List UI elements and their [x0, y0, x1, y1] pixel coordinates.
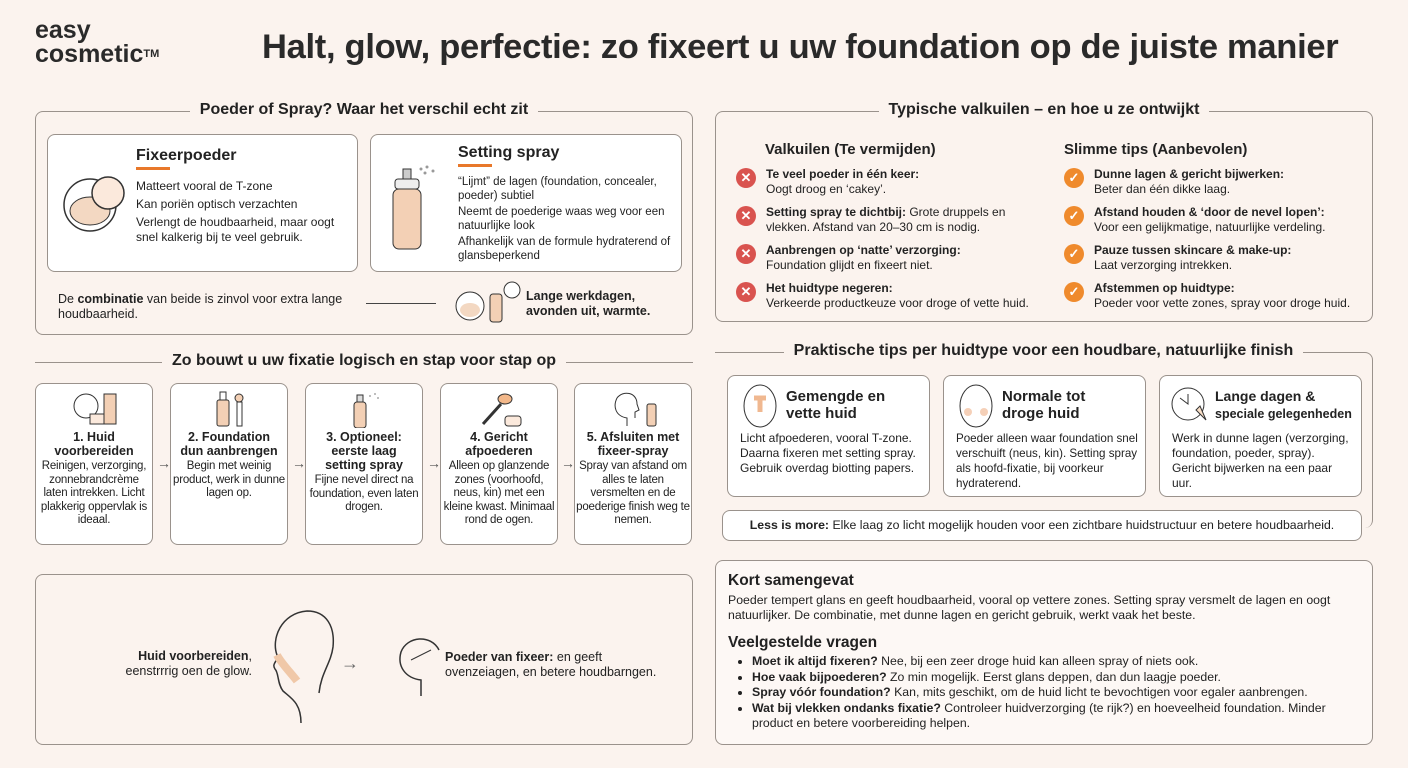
card: setting spray: Neemt de poederige waas weg voor een natuurlijke look — [458, 206, 664, 232]
step 1 — [35, 383, 153, 545]
callout: less is more: Less is more: Elke laag zo licht mogelijk houden voor een zichtbare huidstructuur en betere houdbaarheid. — [750, 518, 1334, 532]
title: Halt, glow, perfectie: zo fixeert u uw foundation op de juiste manier — [262, 28, 1338, 66]
text: Praktische tips per huidtype voor een houdbare, natuurlijke finish — [794, 342, 1293, 359]
list: tips: ✓ — [1069, 208, 1079, 223]
list: valkuilen: ✕ — [741, 246, 751, 261]
text: combinatie: De combinatie van beide is zinvol voor extra lange houdbaarheid. — [58, 292, 342, 321]
panel: illustratie: eenstrrrig oen de glow. — [126, 664, 252, 678]
card: lange dagen: Lange dagen & — [1215, 388, 1315, 404]
list: valkuilen: Aanbrengen op ‘natte’ verzorging: — [766, 243, 961, 257]
panel: poeder of spray: Lange werkdagen, — [526, 289, 635, 303]
step 3: 3. Optioneel: eerste laag setting spray — [325, 430, 403, 472]
panel: samenvatting & FAQ — [715, 560, 1373, 745]
card: normale huid: Poeder alleen waar foundation snel verschuift (neus, kin). Setting spray als hoofd-fixatie, bij voorkeur hydraterend. — [956, 432, 1138, 490]
logo: cosmeticTM — [35, 40, 159, 68]
list: valkuilen: Het huidtype negeren: — [766, 281, 893, 295]
arrow — [366, 303, 436, 304]
logo: easy — [35, 16, 91, 44]
icon: spray bottle — [392, 166, 434, 250]
panel: poeder of spray — [35, 111, 693, 335]
step 2: 2. Foundation dun aanbrengen — [180, 430, 278, 458]
list: tips: Dunne lagen & gericht bijwerken: — [1094, 167, 1284, 181]
step 3 — [305, 383, 423, 545]
list: faq: Moet ik altijd fixeren? Nee, bij een zeer droge huid kan alleen spray of niets ook. — [752, 654, 1198, 668]
icon: compact — [63, 176, 125, 232]
card: fixeerpoeder: Kan poriën optisch verzachten — [136, 197, 297, 211]
list: tips: ✓ — [1069, 246, 1079, 261]
list: tips: ✓ — [1069, 170, 1079, 185]
arrow: → — [157, 455, 171, 471]
step 2: Begin met weinig product, werk in dunne lagen op. — [173, 460, 285, 499]
card: setting spray — [370, 134, 682, 272]
icon: face profile — [273, 610, 334, 723]
panel: valkuilen: Valkuilen (Te vermijden) — [765, 141, 936, 158]
panel: valkuilen — [715, 111, 1373, 322]
list: faq — [738, 654, 1326, 730]
panel: poeder of spray: avonden uit, warmte. — [526, 304, 650, 318]
panel: samenvatting & FAQ: Kort samengevat — [728, 572, 854, 589]
list: valkuilen: ✕ — [741, 170, 751, 185]
panel: samenvatting & FAQ: Poeder tempert glans en geeft houdbaarheid, vooral op vettere zones. Setting spray versmelt de lagen en oogt natuurlijker. De combinatie, met dunne lagen en gericht gebruik, werkt vaak het beste. — [728, 593, 1330, 622]
card: setting spray: Setting spray — [458, 144, 559, 161]
card: lange dagen — [1159, 375, 1362, 497]
step 2 — [170, 383, 288, 545]
list: tips: ✓ — [1069, 284, 1079, 299]
list: tips: Afstand houden & ‘door de nevel lopen’: — [1094, 205, 1325, 219]
list: tips: Afstemmen op huidtype: — [1094, 281, 1235, 295]
list: valkuilen: ✕ — [741, 208, 751, 223]
card: normale huid: Normale tot — [1002, 388, 1085, 405]
icon: profile 2 — [399, 638, 440, 696]
list: valkuilen — [736, 167, 1029, 310]
panel: samenvatting & FAQ: Veelgestelde vragen — [728, 634, 877, 651]
step 1: Reinigen, verzorging, zonnebrandcrème laten intrekken. Licht plakkerig oppervlak is ideaal. — [41, 460, 147, 526]
panel: huidtypes — [715, 352, 1373, 528]
panel: illustratie — [35, 574, 693, 745]
step 4 — [440, 383, 558, 545]
step 1: 1. Huid voorbereiden — [54, 430, 134, 458]
list: valkuilen: Setting spray te dichtbij: Grote druppels en vlekken. Afstand van 20–30 cm is nodig. — [766, 205, 1005, 234]
list: tips: Poeder voor vette zones, spray voor droge huid. — [1094, 296, 1350, 310]
logo — [35, 16, 159, 68]
list: valkuilen: Foundation glijdt en fixeert niet. — [766, 258, 933, 272]
step 5: Spray van afstand om alles te laten versmelten en de poederige finish weg te nemen. — [576, 460, 690, 526]
list: valkuilen: Verkeerde productkeuze voor droge of vette huid. — [766, 296, 1029, 310]
list: faq: Spray vóór foundation? Kan, mits geschikt, om de huid licht te bevochtigen voor egaler aanbrengen. — [752, 685, 1308, 699]
step 4: Alleen op glanzende zones (voorhoofd, neus, kin) met een kleine kwast. Minimaal rond de ogen. — [444, 460, 554, 526]
card: lange dagen: speciale gelegenheden — [1215, 407, 1352, 421]
step 5: 5. Afsluiten met fixeer-spray — [587, 430, 679, 458]
panel: valkuilen: Slimme tips (Aanbevolen) — [1064, 141, 1247, 158]
step 3: Fijne nevel direct na foundation, even laten drogen. — [310, 474, 418, 513]
card: gemengde huid: Gemengde en — [786, 388, 885, 405]
text: Typische valkuilen – en hoe u ze ontwijkt — [889, 101, 1199, 118]
card: setting spray: “Lijmt” de lagen (foundation, concealer, poeder) subtiel — [458, 176, 657, 202]
card: lange dagen: Werk in dunne lagen (verzorging, foundation, poeder, spray). Gericht bijwerken na een paar uur. — [1172, 431, 1349, 490]
heading: Poeder of Spray? Waar het verschil echt zit — [200, 101, 528, 118]
icon: combo — [456, 282, 520, 322]
list: tips: Laat verzorging intrekken. — [1094, 258, 1232, 272]
card: gemengde huid: vette huid — [786, 405, 857, 422]
list: tips: Voor een gelijkmatige, natuurlijke verdeling. — [1094, 220, 1325, 234]
text: Zo bouwt u uw fixatie logisch en stap voor stap op — [172, 352, 556, 369]
card: setting spray: Afhankelijk van de formule hydraterend of glansbeperkend — [458, 236, 670, 262]
panel: illustratie: Huid voorbereiden, — [138, 649, 252, 663]
list: valkuilen: Te veel poeder in één keer: — [766, 167, 919, 181]
list: faq: Hoe vaak bijpoederen? Zo min mogelijk. Eerst glans deppen, dan dun laagje poeder. — [752, 670, 1221, 684]
card: fixeerpoeder: Verlengt de houdbaarheid, maar oogt snel kalkerig bij te veel gebruik. — [136, 215, 334, 244]
list: valkuilen: Oogt droog en ‘cakey’. — [766, 182, 886, 196]
arrow: → — [427, 455, 441, 471]
panel: illustratie: ovenzeiagen, en betere houdbarngen. — [445, 665, 656, 679]
list: tips: Beter dan één dikke laag. — [1094, 182, 1230, 196]
card: gemengde huid — [727, 375, 930, 497]
list: faq: Wat bij vlekken ondanks fixatie? Controleer huidverzorging (te rijk?) en hoeveelheid foundation. Minder product en betere voorbereiding helpen. — [752, 700, 1326, 730]
card: gemengde huid: Licht afpoederen, vooral T-zone. Daarna fixeren met setting spray. Gebruik overdag biotting papers. — [740, 431, 916, 475]
card: fixeerpoeder — [47, 134, 358, 272]
arrow: → — [561, 455, 575, 471]
list: tips: Pauze tussen skincare & make-up: — [1094, 243, 1291, 257]
card: fixeerpoeder: Matteert vooral de T-zone — [136, 179, 273, 193]
step 4: 4. Gericht afpoederen — [465, 430, 533, 458]
list: valkuilen: ✕ — [741, 284, 751, 299]
section heading: stappen — [35, 362, 693, 363]
panel: illustratie: Poeder van fixeer: en geeft — [445, 650, 602, 664]
arrow: → — [292, 455, 306, 471]
card: fixeerpoeder: Fixeerpoeder — [136, 147, 236, 164]
list: tips — [1064, 167, 1350, 310]
step 5 — [574, 383, 692, 545]
callout: less is more — [722, 510, 1362, 541]
card: normale huid — [943, 375, 1146, 497]
panel: illustratie: → — [341, 653, 359, 673]
card: normale huid: droge huid — [1002, 405, 1080, 422]
